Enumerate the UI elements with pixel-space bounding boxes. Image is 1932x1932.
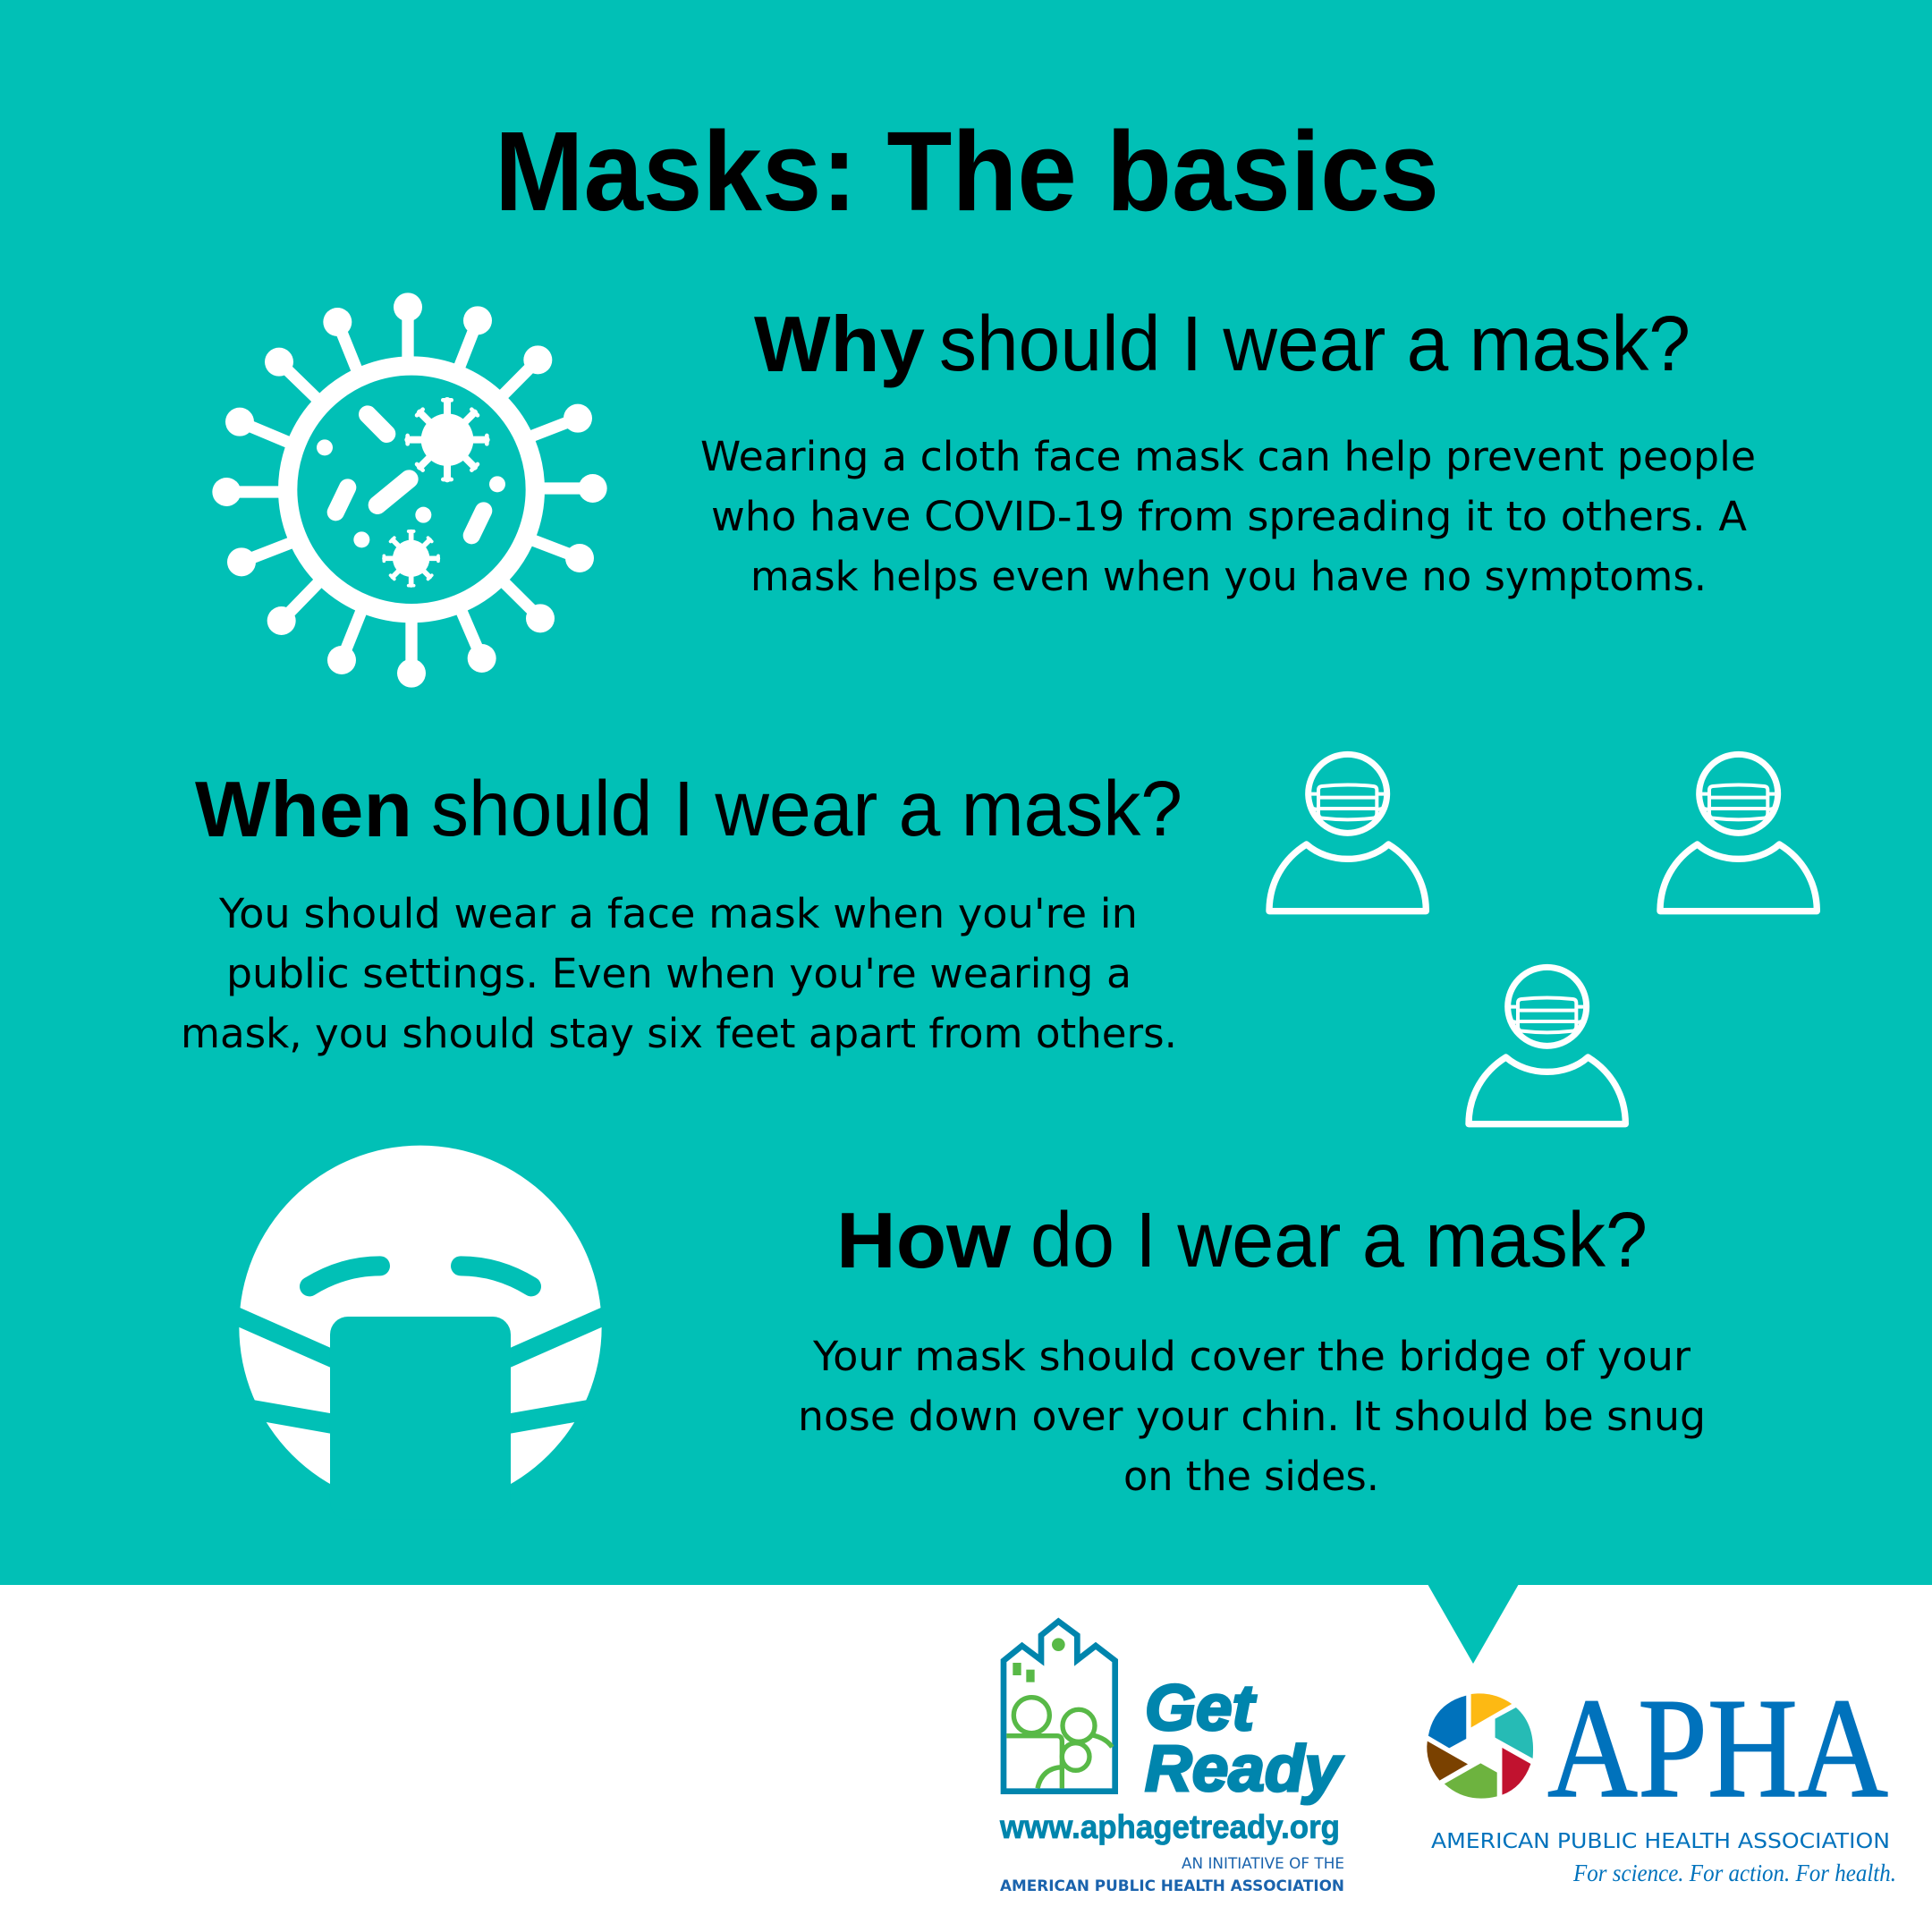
APHA name: AMERICAN PUBLIC HEALTH ASSOCIATION	[1431, 1830, 1890, 1853]
text block: how: Your mask should cover the bridge of your	[812, 1333, 1691, 1380]
speech pointer triangle	[1428, 1584, 1519, 1664]
face mask	[1702, 784, 1775, 819]
icon: masked person bottom	[1469, 967, 1625, 1124]
title: Masks: The basics	[495, 108, 1439, 234]
logo wordmark second line: Ready	[1145, 1733, 1344, 1805]
logo initiative line: AN INITIATIVE OF THE	[1182, 1855, 1344, 1872]
heading: how: do I wear a mask?	[1030, 1197, 1648, 1284]
icon: virus with germs	[212, 292, 607, 688]
heading: why: should I wear a mask?	[939, 301, 1690, 387]
virus spikes	[226, 307, 593, 674]
face circle	[239, 1146, 602, 1508]
heading: why: Why	[754, 300, 925, 388]
logo url: www.aphagetready.org	[999, 1809, 1340, 1845]
head	[1309, 754, 1387, 833]
shoulders	[1469, 1057, 1625, 1124]
heading: how: How	[836, 1196, 1012, 1284]
text block: how	[798, 1333, 1706, 1500]
virus outer ring	[288, 366, 535, 614]
shoulders	[1660, 844, 1817, 911]
text block: when: public settings. Even when you're wearing a	[226, 950, 1131, 997]
face mask	[1311, 784, 1384, 819]
logo house mark	[1004, 1622, 1115, 1792]
logo wordmark: Get	[1145, 1673, 1257, 1744]
house outline	[1004, 1622, 1115, 1792]
eyes	[309, 1266, 531, 1286]
text block: how: on the sides.	[1123, 1453, 1379, 1500]
APHA tagline: For science. For action. For health.	[1572, 1860, 1896, 1886]
APHA wordmark: APHA	[1547, 1668, 1888, 1827]
germ dots	[317, 439, 505, 547]
APHA color wheel	[1427, 1693, 1533, 1799]
shoulders	[1269, 844, 1426, 911]
icon: masked person top right	[1660, 754, 1817, 911]
mask body	[330, 1317, 511, 1520]
text block: why: Wearing a cloth face mask can help prevent people	[700, 433, 1756, 480]
virus spike knobs	[212, 292, 607, 688]
mask straps	[233, 1304, 608, 1434]
icon: face with mask	[233, 1146, 608, 1520]
logo: Get Ready	[999, 1622, 1344, 1894]
small virus small	[384, 531, 438, 586]
text block: when: You should wear a face mask when you're in	[218, 890, 1138, 937]
face mask	[1511, 997, 1583, 1032]
text block: why: mask helps even when you have no symptoms.	[750, 553, 1707, 600]
house windows and people	[1006, 1638, 1112, 1788]
text block: when: mask, you should stay six feet apart from others.	[181, 1010, 1177, 1057]
head	[1699, 754, 1778, 833]
text block: how: nose down over your chin. It should be snug	[798, 1393, 1706, 1440]
logo: APHA	[1427, 1668, 1896, 1886]
small virus large	[408, 400, 487, 479]
text block: why	[700, 433, 1756, 600]
head	[1508, 967, 1587, 1046]
heading: when: should I wear a mask?	[431, 766, 1182, 852]
logo association line: AMERICAN PUBLIC HEALTH ASSOCIATION	[1000, 1877, 1344, 1894]
text block: when	[181, 890, 1177, 1057]
bacteria pills	[335, 414, 484, 536]
icon: masked person top left	[1269, 754, 1426, 911]
heading: when: When	[195, 765, 412, 853]
text block: why: who have COVID-19 from spreading it to others. A	[711, 493, 1747, 540]
